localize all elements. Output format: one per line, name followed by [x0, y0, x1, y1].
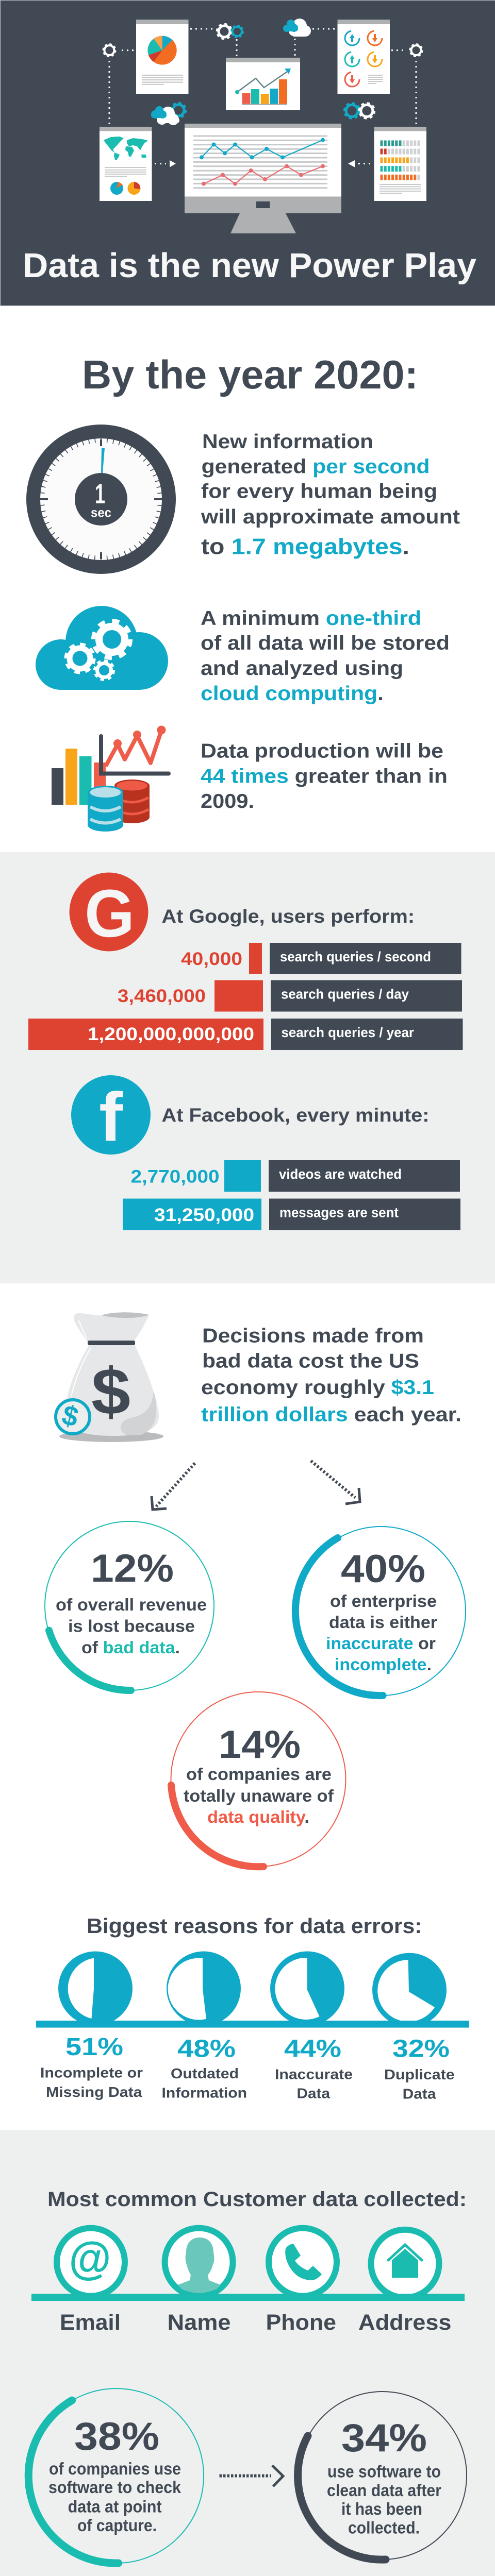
icon: person — [162, 2225, 236, 2299]
arrows to monitor — [170, 160, 355, 167]
text: per second: New information — [202, 431, 373, 453]
bar row: queries per year: 1,200,000,000,000 — [88, 1024, 254, 1044]
document: world map — [100, 127, 152, 201]
stat circle: 12%: is lost because — [68, 1617, 195, 1636]
text: data production — [201, 740, 448, 812]
stat circle: 34%: use software to — [327, 2462, 441, 2481]
text: bad data cost — [201, 1325, 461, 1426]
icon: money bag: $ — [59, 1399, 81, 1433]
labels: customer data — [60, 2310, 452, 2335]
text: cloud computing: and analyzed using — [201, 657, 403, 680]
icon: email — [54, 2225, 128, 2299]
icons: gears — [103, 24, 422, 118]
labels: data errors: Data — [297, 2086, 330, 2102]
labels: data errors: Data — [403, 2086, 436, 2102]
icon: stopwatch: 1 — [95, 479, 105, 510]
bar row: queries per second — [181, 943, 461, 974]
bar row: queries per year — [28, 1019, 463, 1050]
icon: phone — [266, 2225, 340, 2299]
icon: stopwatch: sec — [91, 506, 111, 520]
icon: chart and databases — [52, 725, 169, 832]
icon row: customer data — [31, 2225, 465, 2301]
heading: facebook: At Facebook, every minute: — [162, 1105, 429, 1126]
icon: house — [368, 2227, 442, 2301]
bar row: videos — [131, 1160, 460, 1192]
text: cloud computing: cloud computing . — [201, 683, 384, 705]
labels: customer data: Phone — [266, 2310, 336, 2335]
stat circle: 34%: clean data after — [327, 2481, 441, 2500]
stat circle: 14%: totally unaware of — [184, 1786, 334, 1805]
icon: cloud pair left — [151, 106, 179, 125]
bar row: queries per second: 40,000 — [181, 949, 242, 969]
stat circle: 38%: data at point — [68, 2497, 162, 2516]
stat circle: 40%: data is either — [329, 1613, 437, 1632]
labels: data errors: Outdated — [171, 2065, 239, 2081]
icon: email: @ — [69, 2232, 111, 2283]
stat circle: 14%: of companies are — [186, 1765, 332, 1784]
labels: data errors: 48% — [177, 2036, 236, 2063]
text: cloud computing: A minimum one-third — [201, 607, 421, 630]
stat circle: 14% — [171, 1692, 345, 1867]
labels: data errors: Incomplete or — [40, 2065, 143, 2080]
stat circle: 34%: it has been — [341, 2499, 422, 2518]
text: cloud computing: of all data will be stored — [201, 632, 450, 654]
labels: data errors: 32% — [392, 2036, 450, 2063]
labels: customer data: Address — [358, 2310, 452, 2335]
bar row: queries per day — [118, 980, 462, 1012]
stat circle: 14%: data quality. — [207, 1807, 309, 1826]
bar row: queries per day: search queries / day — [281, 986, 409, 1002]
stat circle: 40%: 40% — [341, 1547, 425, 1591]
document: people chart — [374, 127, 426, 201]
arrow: down right — [311, 1461, 360, 1504]
icon: cloud pair top — [283, 19, 311, 37]
text: data production: Data production will be — [201, 740, 443, 762]
stat circle: 12% — [45, 1521, 214, 1690]
bar row: messages: messages are sent — [279, 1205, 399, 1220]
panel: customer data collection — [0, 2130, 495, 2576]
stat circle: 12%: of bad data. — [81, 1638, 180, 1657]
dotted connectors — [109, 29, 416, 164]
bar row: queries per second: search queries / second — [280, 949, 431, 964]
icon: google: G — [85, 875, 135, 951]
panel: google and facebook stats — [0, 852, 495, 1283]
arrow: down left — [152, 1463, 195, 1510]
text: cloud computing — [201, 607, 450, 705]
bar row: messages — [123, 1198, 460, 1230]
text: per second — [201, 431, 460, 560]
stat circle: 34% — [298, 2392, 467, 2560]
text: bad data cost: bad data cost the US — [202, 1350, 419, 1372]
document: bar chart — [226, 58, 300, 110]
bar row: queries per year: search queries / year — [282, 1025, 414, 1040]
pie row: data errors — [36, 1952, 469, 2028]
stat circle: 38%: software to check — [48, 2478, 182, 2497]
heading: google: At Google, users perform: — [162, 906, 415, 927]
labels: data errors: 51% — [65, 2033, 123, 2061]
stat circle: 40%: inaccurate or — [326, 1634, 436, 1653]
text: data production: 44 times greater than in — [201, 766, 448, 787]
stat circle: 38%: 38% — [74, 2415, 159, 2459]
stat circle: 38%: of capture. — [77, 2516, 157, 2535]
icon: facebook: f — [99, 1079, 123, 1156]
text: per second: will approximate amount — [201, 506, 460, 528]
document: arrows — [337, 20, 390, 94]
text: per second: to 1.7 megabytes . — [201, 534, 409, 560]
icon: cloud with gears — [36, 606, 168, 690]
heading: by the year 2020: By the year 2020: — [82, 352, 418, 397]
document: pie chart — [136, 20, 189, 94]
labels: data errors: Information — [162, 2084, 247, 2101]
text: bad data cost: trillion dollars each year. — [201, 1404, 461, 1426]
labels: data errors — [40, 2033, 455, 2102]
stat circle: 34%: collected. — [348, 2518, 420, 2537]
stat circle: 40%: incomplete. — [335, 1655, 432, 1674]
arrow: 38 to 34 — [220, 2466, 283, 2486]
monitor — [185, 124, 341, 233]
pie: 48% — [167, 1952, 241, 2026]
icon: money bag — [56, 1312, 163, 1442]
text: bad data cost: Decisions made from — [202, 1325, 424, 1347]
bar row: queries per day: 3,460,000 — [118, 986, 206, 1006]
stat circle: 14%: 14% — [219, 1723, 301, 1767]
pie: 44% — [270, 1952, 344, 2026]
stat circle: 38%: of companies use — [49, 2459, 181, 2478]
pie: 32% — [372, 1953, 447, 2027]
stat circle: 34%: 34% — [341, 2416, 427, 2460]
bar row: videos: videos are watched — [279, 1166, 402, 1182]
text: per second: for every human being — [201, 481, 437, 503]
labels: customer data: Name — [167, 2310, 231, 2335]
text: bad data cost: economy roughly $3.1 — [201, 1377, 434, 1399]
bar row: videos: 2,770,000 — [131, 1166, 220, 1187]
labels: data errors: 44% — [284, 2036, 341, 2063]
text: data production: 2009. — [201, 790, 254, 812]
labels: data errors: Duplicate — [384, 2066, 455, 2082]
icon: google — [69, 873, 148, 951]
icon: facebook — [71, 1075, 151, 1156]
stat circle: 38% — [28, 2388, 204, 2563]
stat circle: 40% — [295, 1527, 466, 1696]
panel: header — [0, 0, 495, 306]
icon: stopwatch — [26, 425, 176, 574]
heading: biggest reasons: Biggest reasons for data errors: — [87, 1914, 422, 1938]
labels: data errors: Missing Data — [46, 2084, 142, 2100]
title: Data is the new Power Play — [23, 246, 476, 285]
bar row: messages: 31,250,000 — [154, 1205, 254, 1225]
stat circle: 12%: of overall revenue — [56, 1595, 207, 1614]
icon: money bag: $ — [91, 1355, 130, 1429]
heading: customer data: Most common Customer data collected: — [47, 2188, 467, 2211]
stat circle: 12%: 12% — [91, 1547, 174, 1590]
stat circle: 40%: of enterprise — [330, 1591, 437, 1611]
labels: data errors: Inaccurate — [275, 2066, 353, 2082]
text: per second: generated per second — [202, 455, 430, 478]
labels: customer data: Email — [60, 2310, 121, 2335]
pie: 51% — [58, 1952, 133, 2026]
